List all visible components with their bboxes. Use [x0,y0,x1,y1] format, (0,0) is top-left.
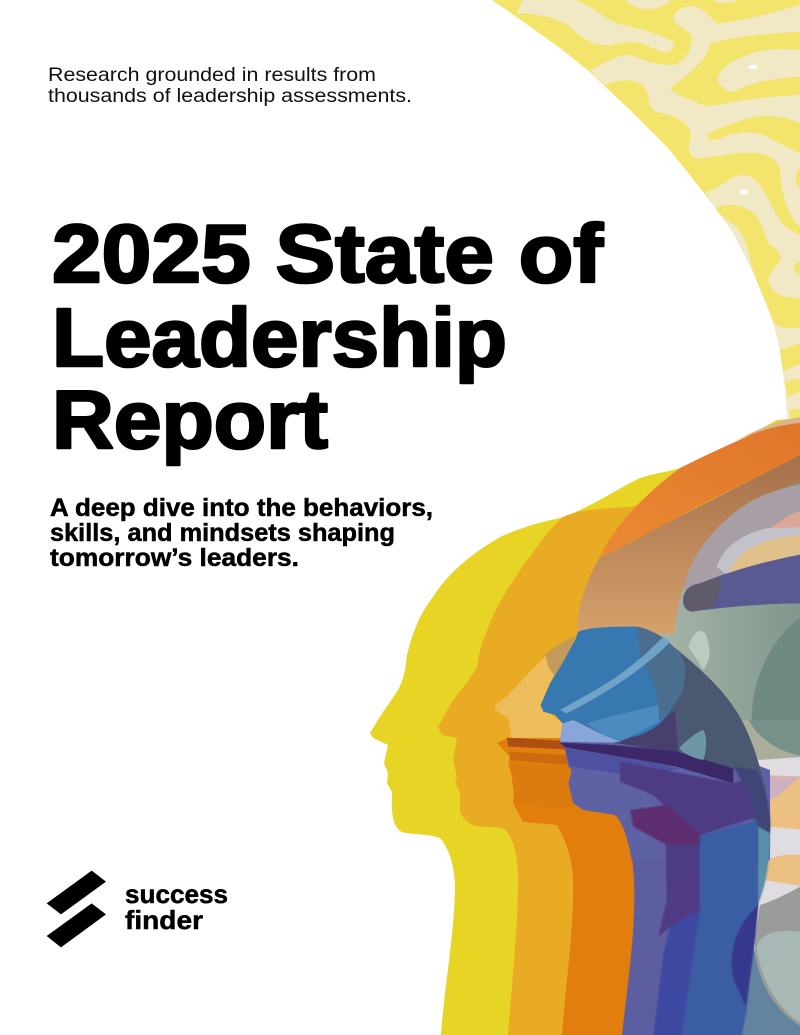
neck: blue column [682,820,758,1035]
head upper: orange band [600,421,800,557]
subtitle: A deep dive into the behaviors, [50,494,433,522]
backdrop [737,720,800,1035]
head rear: gray-green lobe [660,482,800,727]
neck: purple patch [658,870,700,937]
light blue chin [560,720,620,743]
subtitle [50,494,433,572]
band: mouth shadows [507,738,573,810]
neck: purple middle [620,762,758,900]
neck colour patches [620,762,770,1035]
neck: magenta patch [630,805,700,845]
brain detail lower: pastel folds [733,720,800,1035]
head layer: deep orange neck [497,738,800,1035]
title: 2025 State of [52,207,603,300]
dark head and indigo profile [560,647,770,862]
dark edge strip [733,767,770,833]
head upper: sand sliver [735,417,800,441]
tan forehead patch [545,635,575,677]
teal edge strip [758,827,770,903]
intro text: Research grounded in results from [48,65,376,86]
dark head rear [613,647,770,862]
head lower: indigo column [622,855,800,1035]
subtitle: skills, and mindsets shaping [50,519,395,547]
background: yellow brain-pattern swirl [400,0,800,445]
title [52,207,603,466]
mid-blue jaw [587,705,659,742]
intro text [48,65,412,107]
dark finger shape [683,553,800,612]
logo wordmark: finder [125,905,203,935]
pastel stripes [763,775,800,830]
neck: royal blue column [653,910,700,1035]
head upper: tan zone [577,455,800,780]
face: pale amber third profile [495,650,567,742]
slate rear of head [637,627,685,720]
head layer: amber [438,450,800,1035]
subtitle: tomorrow’s leaders. [50,544,299,572]
illustration: layered head silhouettes [370,417,800,1035]
logo wordmark: success [125,879,228,909]
light streak [560,637,670,713]
blue head [541,627,685,743]
head layer: yellow [370,418,800,1035]
white curve masking the swirl [400,0,788,445]
logo: Success Finder [47,871,228,947]
logo mark [47,871,106,947]
purple shadow beneath blue head [613,710,678,753]
teal teardrop [679,730,706,760]
purple mouth band [560,743,733,783]
upper gray-green continuation [737,720,800,760]
intro text: thousands of leadership assessments. [48,86,412,107]
title: Report [52,373,328,466]
gray lower lobe [755,883,800,1035]
title: Leadership [52,291,507,384]
indigo upper patch [565,748,680,777]
neck: navy oval [732,905,758,1007]
logo wordmark [125,879,228,935]
indigo profile [560,737,770,860]
brain detail upper: pastel folds [660,482,800,727]
blue profile group [541,627,733,783]
